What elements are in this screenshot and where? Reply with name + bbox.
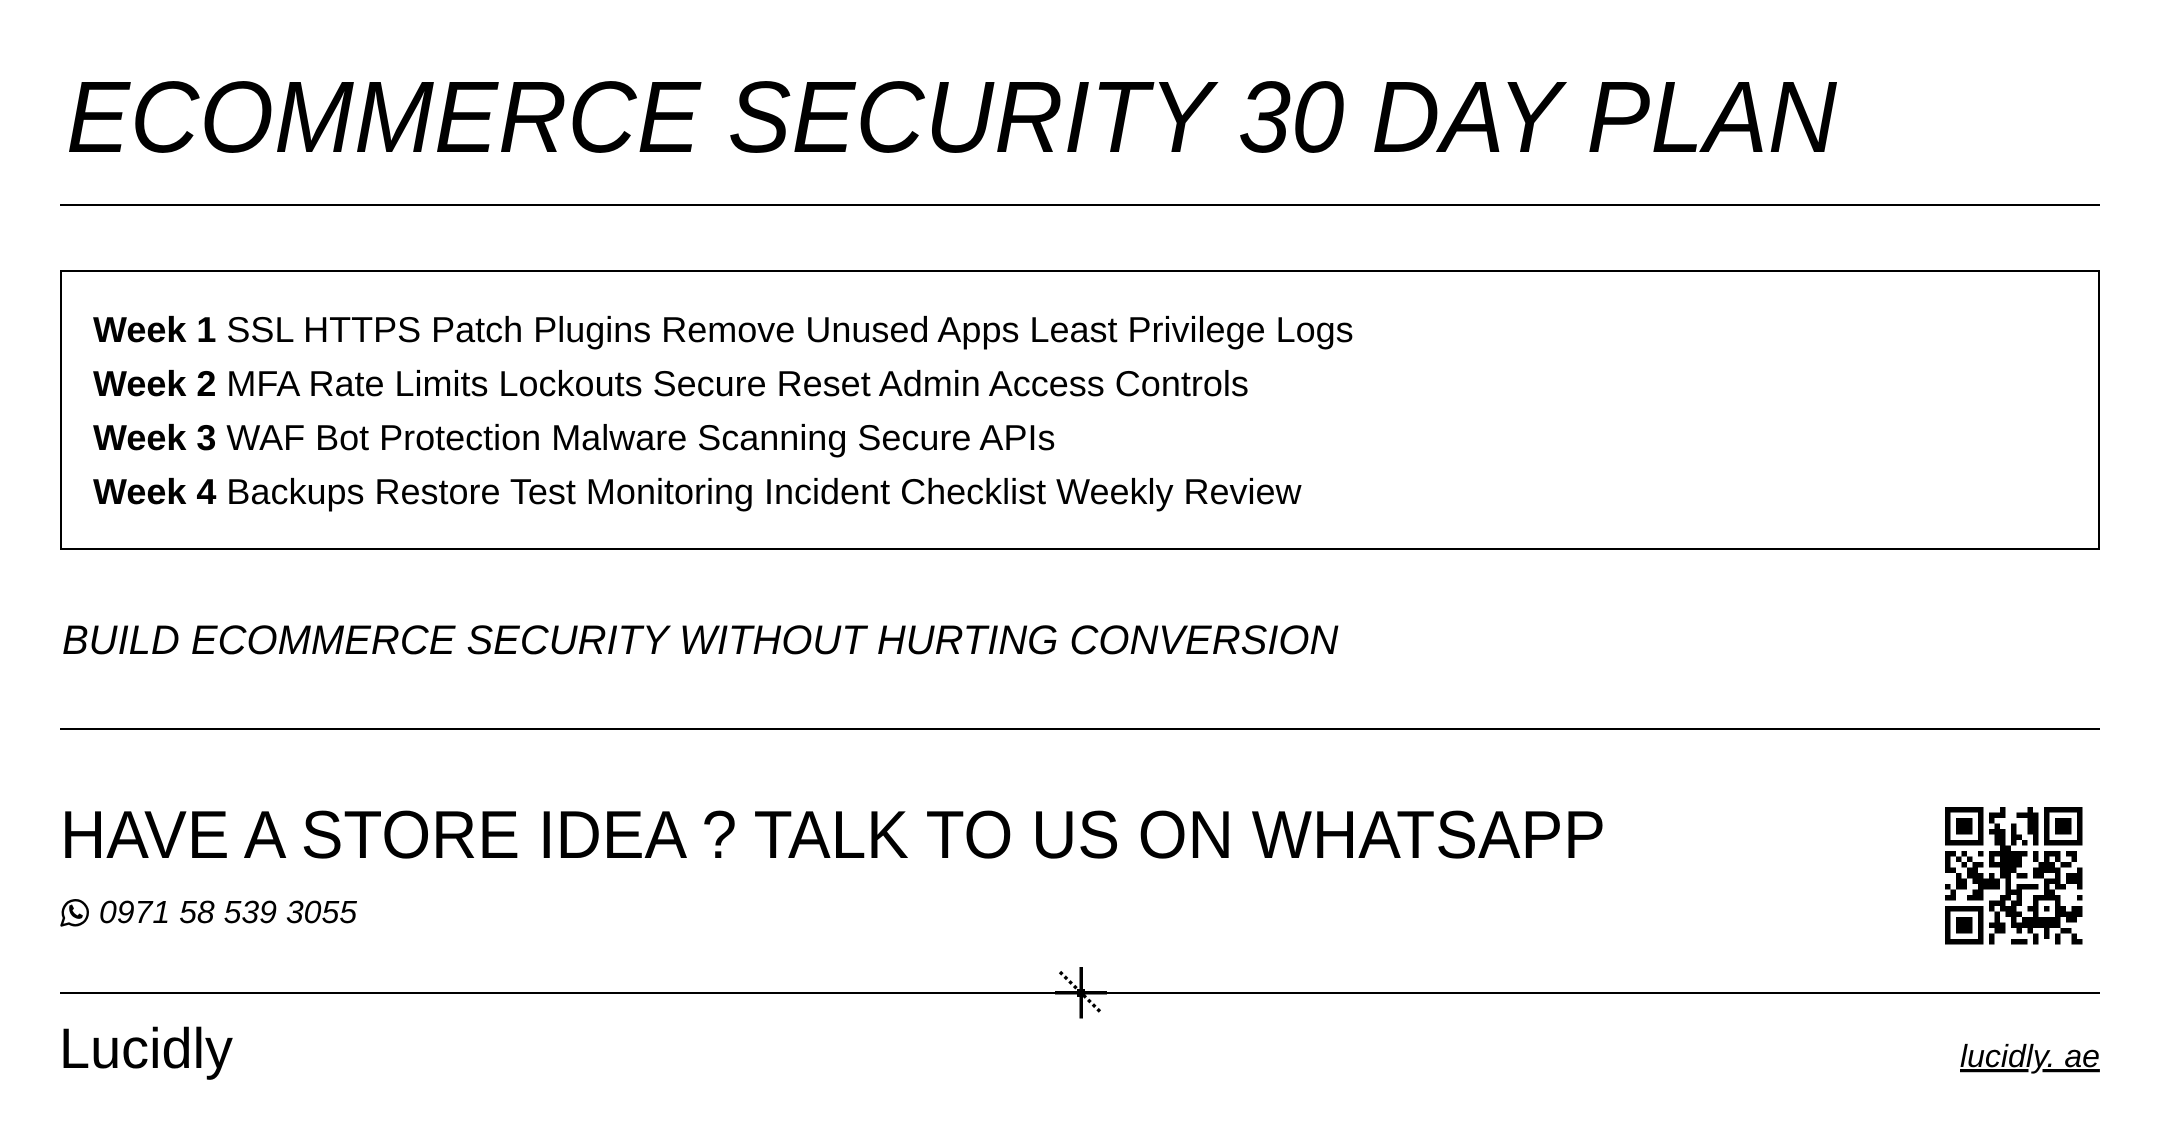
tagline: BUILD ECOMMERCE SECURITY WITHOUT HURTING CONVERSION bbox=[62, 618, 1338, 663]
icon: crosshair star bbox=[1055, 967, 1107, 1018]
icon: whatsapp bbox=[62, 900, 88, 926]
week 1 line: Week 1 SSL HTTPS Patch Plugins Remove Unused Apps Least Privilege Logs bbox=[93, 309, 1354, 350]
phone number: 0971 58 539 3055 bbox=[99, 894, 357, 930]
icon: QR code bbox=[1945, 807, 2082, 944]
website link: lucidly. ae bbox=[1960, 1038, 2100, 1074]
title: ECOMMERCE SECURITY 30 DAY PLAN bbox=[66, 61, 1838, 174]
week 3 line: Week 3 WAF Bot Protection Malware Scanning Secure APIs bbox=[93, 417, 1055, 458]
week 4 line: Week 4 Backups Restore Test Monitoring Incident Checklist Weekly Review bbox=[93, 471, 1303, 512]
week 2 line: Week 2 MFA Rate Limits Lockouts Secure Reset Admin Access Controls bbox=[93, 363, 1249, 404]
call to action heading: HAVE A STORE IDEA ? TALK TO US ON WHATSAPP bbox=[60, 797, 1606, 873]
logo: Lucidly: Lucidly bbox=[59, 1017, 233, 1081]
panel: weekly plan bbox=[61, 271, 2099, 549]
